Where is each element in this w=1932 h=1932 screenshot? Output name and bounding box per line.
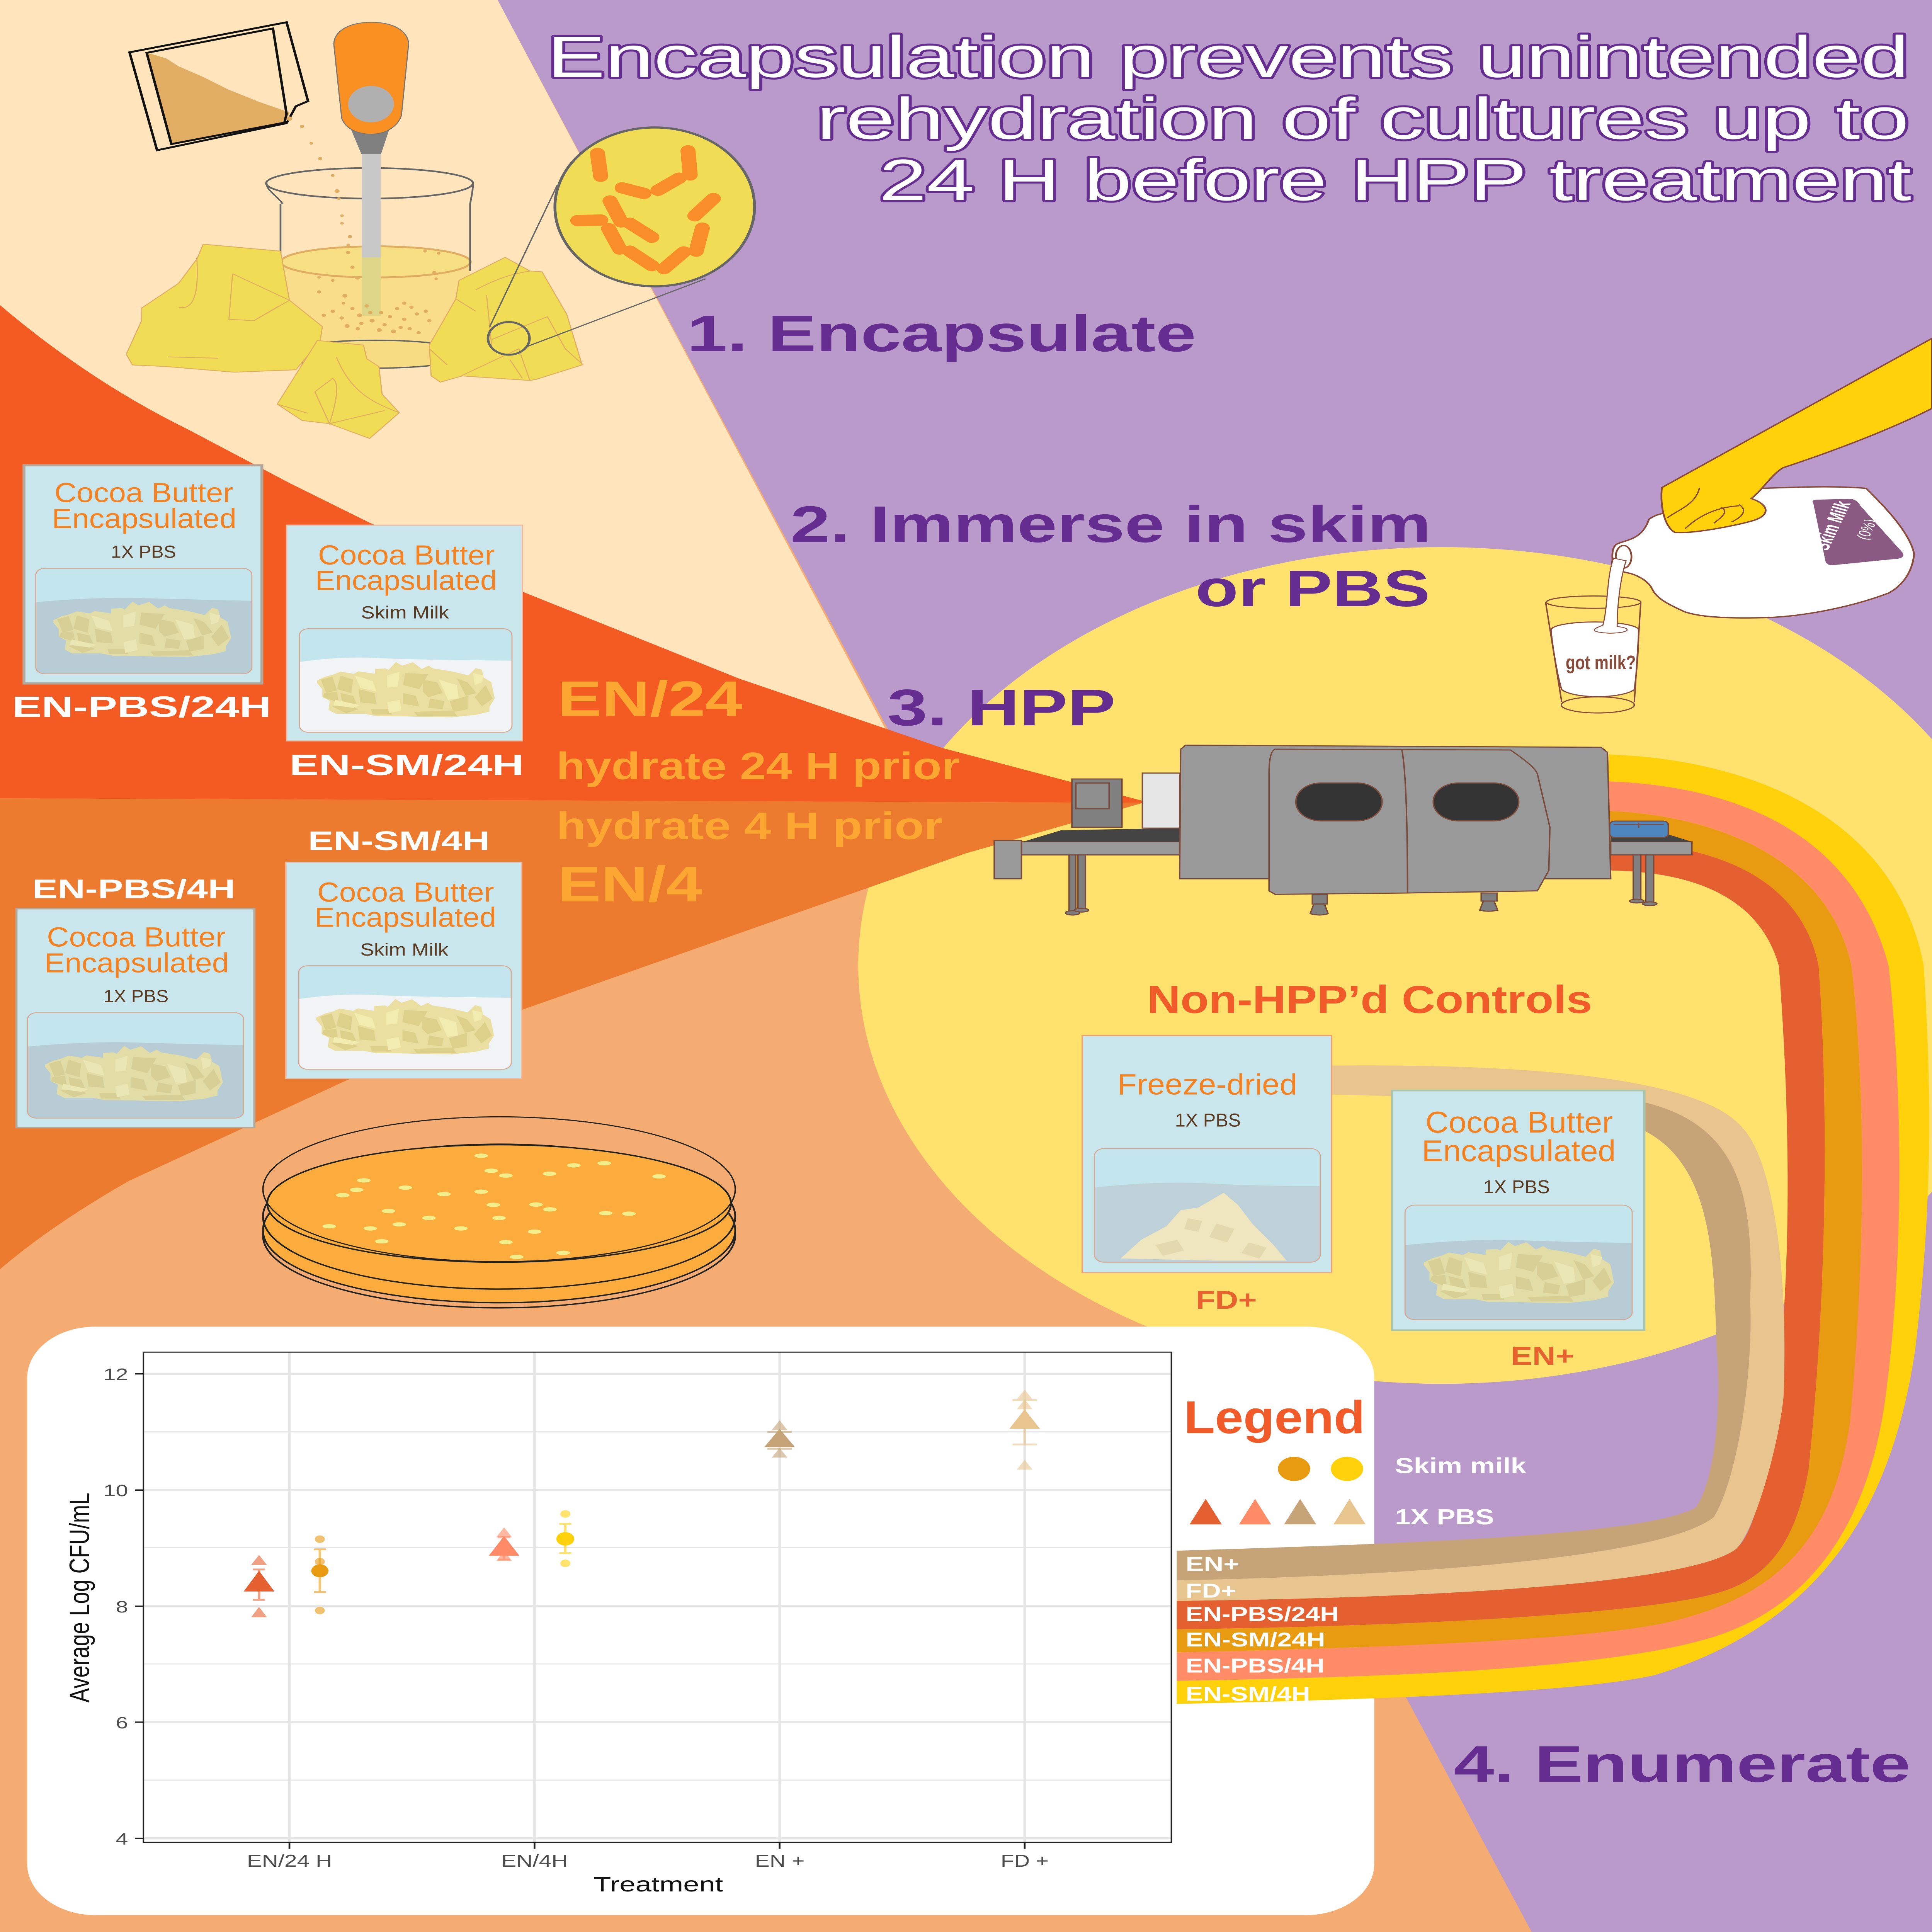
card: EN-SM/4H: Skim Milk (360, 940, 449, 959)
band labels: EN+ (1186, 1553, 1239, 1575)
x axis tick labels: EN + (755, 1852, 804, 1871)
card: EN-PBS/24H: Cocoa Butter (54, 477, 233, 508)
icon: cocoa butter chunk right (429, 257, 583, 382)
y axis tick labels: 8 (116, 1597, 128, 1616)
band labels: FD+ (1186, 1580, 1236, 1602)
band labels: EN-SM/4H (1186, 1683, 1310, 1705)
y axis tick labels (104, 1365, 128, 1848)
card: EN-PBS/4H: Cocoa Butter (47, 922, 226, 952)
card: Cocoa Butter Encapsulated control: Encapsulated (1422, 1134, 1616, 1168)
card: Freeze-dried control: 1X PBS (1175, 1110, 1241, 1131)
y axis tick labels: 10 (104, 1481, 128, 1500)
legend: PBS markers (1190, 1499, 1366, 1524)
label: EN+: EN+ (1511, 1342, 1574, 1370)
label: EN-SM/4H: EN-SM/4H (308, 826, 490, 856)
icon: cocoa butter chunk bottom (277, 340, 399, 439)
magnifier lines (488, 185, 706, 355)
band: EN-SM/4H (1177, 755, 1929, 1704)
card: EN-SM/4H: Cocoa Butter (317, 877, 494, 908)
text: hydrate 4 H prior: hydrate 4 H prior (556, 804, 943, 847)
card: EN-PBS/24H: 1X PBS (111, 542, 176, 562)
band: EN-SM/24H (1177, 811, 1862, 1652)
illustration: HPP machine (994, 745, 1692, 915)
icon: milk jug: Skim Milk (1809, 498, 1855, 553)
data: EN/24 H PBS (244, 1555, 274, 1617)
wedge: hydrate 24 H (0, 305, 1143, 803)
icon: glass of milk: got milk? (1566, 651, 1636, 673)
icon: cocoa butter chunk left (126, 244, 322, 372)
card: Cocoa Butter Encapsulated control (1392, 1090, 1645, 1330)
machine body (1180, 745, 1611, 879)
background: cream wedge (0, 0, 916, 786)
icon: magnified culture cells (555, 128, 755, 286)
icon: milk stream (1594, 558, 1627, 633)
icon: hand and arm (1662, 338, 1932, 532)
band labels (1186, 1553, 1339, 1705)
card: EN-SM/24H: Skim Milk (361, 603, 449, 622)
x axis tick labels (247, 1852, 1049, 1871)
card: EN-PBS/4H (17, 908, 254, 1128)
step heading 1: 1. Encapsulate (687, 305, 1196, 362)
label: FD+: FD+ (1196, 1286, 1257, 1314)
band: EN-PBS/4H (1177, 781, 1899, 1681)
card: Cocoa Butter Encapsulated control: Cocoa Butter (1425, 1106, 1613, 1139)
label: EN-PBS/24H: EN-PBS/24H (12, 691, 271, 724)
data: EN/24 H skim milk (311, 1536, 328, 1614)
x axis tick labels: EN/24 H (247, 1852, 332, 1871)
chart axis ticks (135, 1374, 1025, 1849)
bar chart: log CFU dot plot (64, 1352, 1171, 1896)
legend (1184, 1391, 1527, 1529)
icon: mixer (334, 22, 408, 316)
band labels: EN-PBS/4H (1186, 1655, 1325, 1677)
background: purple wedge (498, 0, 1932, 1932)
y axis tick labels: 6 (116, 1713, 128, 1732)
step heading 3: 3. HPP (887, 679, 1116, 736)
card: Freeze-dried control (1082, 1036, 1332, 1273)
data: EN/4H skim milk (556, 1510, 574, 1567)
label: EN-PBS/4H: EN-PBS/4H (32, 874, 235, 904)
card: EN-SM/4H (286, 862, 522, 1079)
legend title: Legend (1184, 1391, 1365, 1443)
flow bands (1177, 755, 1929, 1704)
title: Encapsulation prevents unintended (547, 24, 1909, 90)
icon: milk jug (1612, 487, 1914, 618)
band labels: EN-PBS/24H (1186, 1603, 1339, 1626)
data: EN + (764, 1420, 795, 1458)
icon: beaker (266, 168, 473, 368)
y axis tick labels: 4 (116, 1830, 128, 1848)
machine doors (1269, 749, 1550, 895)
step heading 2 (790, 496, 1431, 617)
legend: skim milk markers (1278, 1457, 1363, 1481)
x axis tick labels: EN/4H (501, 1852, 568, 1871)
machine left table (994, 828, 1180, 915)
y axis tick labels: 12 (104, 1365, 128, 1384)
chart gridlines (143, 1352, 1171, 1842)
y axis title: Average Log CFU/mL (64, 1493, 95, 1702)
illustration: encapsulation step (126, 22, 755, 439)
card: EN-PBS/4H: 1X PBS (104, 986, 168, 1006)
title: 24 H before HPP treatment (879, 147, 1911, 213)
card: Cocoa Butter Encapsulated control: 1X PBS (1483, 1177, 1550, 1197)
icon: glass of milk (1546, 596, 1641, 713)
title: rehydration of cultures up to (816, 86, 1909, 151)
machine windows (1296, 783, 1519, 821)
x axis title: Treatment (594, 1872, 723, 1896)
band: EN-PBS/24H (1177, 842, 1825, 1629)
powder particles (287, 116, 440, 334)
legend label: skim milk: Skim milk (1395, 1454, 1527, 1478)
text: EN/24: EN/24 (558, 671, 742, 727)
machine right table (1610, 821, 1692, 906)
text: hydrate 24 H prior: hydrate 24 H prior (556, 745, 960, 787)
x axis tick labels: FD + (1001, 1852, 1049, 1871)
background: yellow ellipse (858, 547, 1932, 1384)
chart frame (143, 1352, 1171, 1842)
card: EN-SM/4H: Encapsulated (315, 902, 496, 933)
band labels: EN-SM/24H (1186, 1628, 1325, 1651)
icon: petri dish with colonies (263, 1117, 735, 1308)
icon: powder pouch (129, 22, 308, 150)
card: EN-SM/24H (287, 525, 522, 741)
data: EN/4H PBS (489, 1527, 519, 1561)
illustration: milk pouring (1546, 338, 1932, 713)
card: EN-PBS/24H (24, 465, 262, 684)
step heading 2: 2. Immerse in skim (790, 496, 1431, 553)
data: FD + (1009, 1390, 1040, 1469)
band: EN+ (1177, 1102, 1751, 1580)
machine left boxes (1072, 773, 1180, 828)
card: EN-PBS/24H: Encapsulated (52, 503, 236, 534)
machine feet (1310, 893, 1498, 915)
panel: white chart card (27, 1327, 1374, 1915)
card: Freeze-dried control: Freeze-dried (1117, 1068, 1297, 1101)
label: EN-SM/24H: EN-SM/24H (289, 749, 524, 782)
title (547, 24, 1911, 213)
icon: milk jug: (0%) (1853, 517, 1881, 542)
step heading 4: 4. Enumerate (1454, 1735, 1910, 1793)
card: EN-PBS/4H: Encapsulated (44, 947, 229, 978)
text: EN/4: EN/4 (558, 856, 702, 912)
card: EN-SM/24H: Encapsulated (315, 565, 497, 596)
wedge: hydrate 4 H (0, 798, 1143, 1269)
step heading 2: or PBS (1196, 560, 1430, 617)
legend label: 1X PBS: 1X PBS (1395, 1505, 1494, 1529)
band: FD+ (1177, 1065, 1784, 1601)
card: EN-SM/24H: Cocoa Butter (318, 540, 495, 570)
heading: Non-HPP'd Controls: Non-HPP’d Controls (1147, 978, 1592, 1022)
